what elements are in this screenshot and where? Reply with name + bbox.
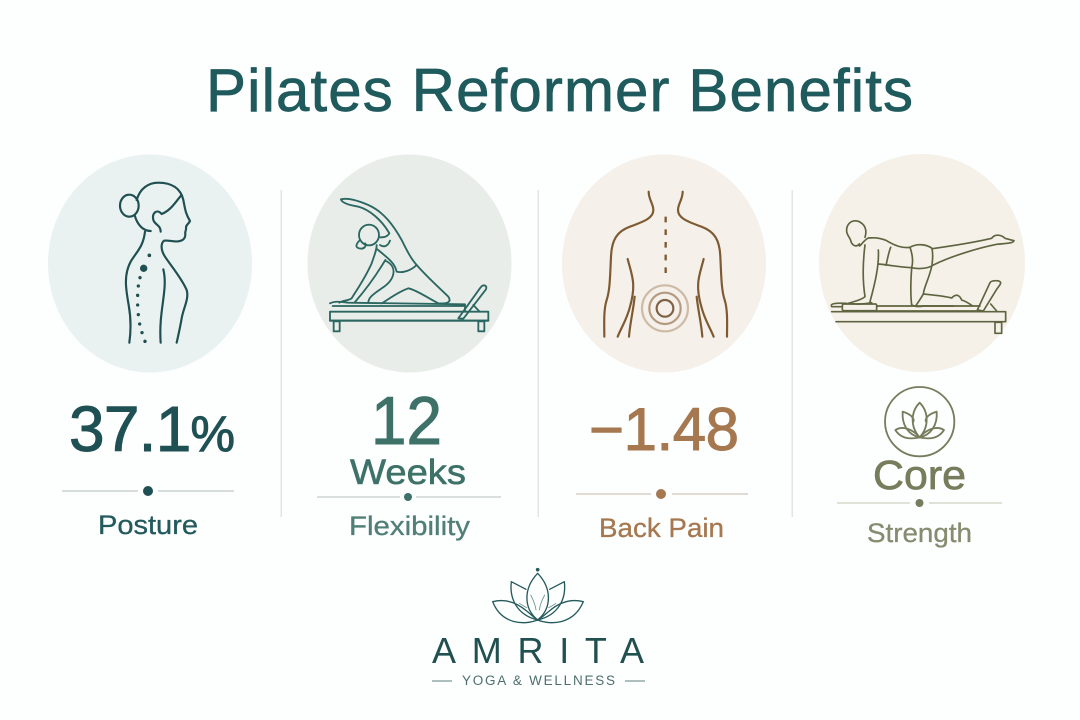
flexibility circle bbox=[308, 154, 512, 372]
divider with dot bbox=[317, 493, 501, 501]
label: Back Pain: Back Pain bbox=[599, 513, 724, 543]
icon: back with lower back pain target bbox=[604, 192, 727, 337]
label: Posture: Posture bbox=[98, 510, 198, 540]
core circle bbox=[819, 154, 1025, 372]
divider with dot bbox=[576, 489, 748, 499]
back pain circle bbox=[562, 154, 766, 372]
icon: posture side profile with spine bbox=[120, 183, 190, 343]
stat: −1.48: −1.48 bbox=[589, 396, 739, 463]
panel: back pain bbox=[562, 154, 766, 543]
icon: lotus in circle bbox=[885, 387, 954, 456]
stat: 37.1%: 37.1% bbox=[69, 393, 235, 465]
label: Flexibility: Flexibility bbox=[349, 511, 471, 541]
label: Strength: Strength bbox=[867, 518, 972, 548]
divider with dot bbox=[837, 499, 1002, 507]
stat: Weeks: Weeks bbox=[350, 453, 466, 492]
panel: flexibility bbox=[308, 154, 512, 541]
icon: logo lotus bbox=[493, 568, 583, 623]
stat: 12: 12 bbox=[371, 383, 442, 459]
panel: posture bbox=[48, 154, 252, 540]
title: Pilates Reformer Benefits bbox=[206, 57, 913, 124]
panel: core strength bbox=[819, 154, 1025, 548]
tagline: Yoga & Wellness: YOGA & WELLNESS bbox=[462, 673, 615, 688]
icon: side stretch on reformer bbox=[330, 199, 488, 331]
logo: Amrita Yoga & Wellness bbox=[432, 568, 645, 688]
icon: bird dog pose on reformer bbox=[831, 221, 1014, 333]
stat: Core: Core bbox=[873, 452, 966, 498]
divider with dot bbox=[62, 486, 234, 496]
wordmark: AMRITA: AMRITA bbox=[432, 630, 644, 671]
posture circle bbox=[48, 154, 252, 372]
